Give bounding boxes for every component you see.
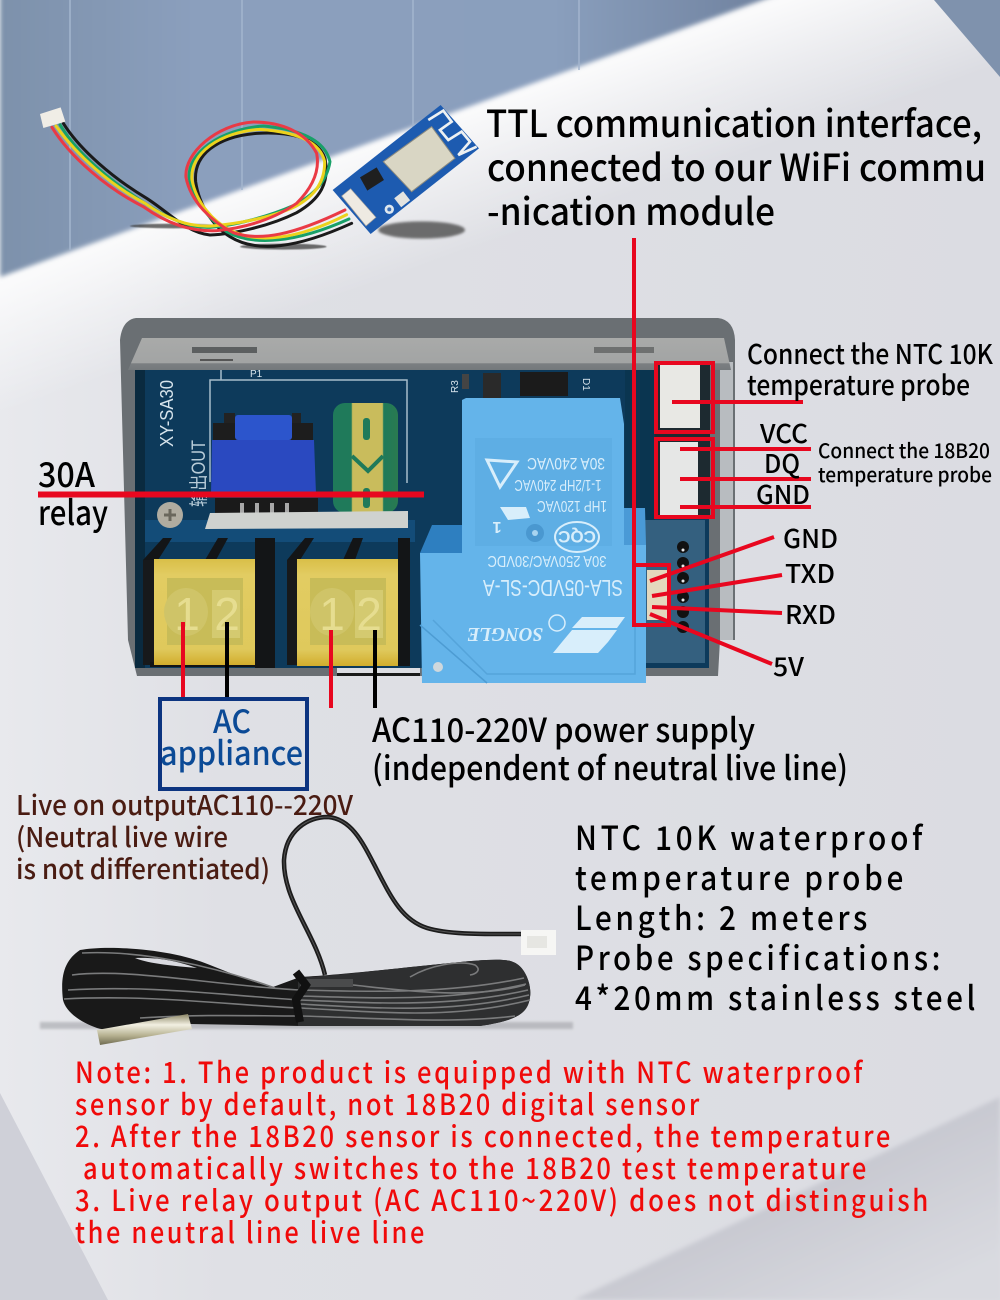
blue relay: SONGLE bbox=[467, 623, 543, 645]
silkscreen labels: R3 bbox=[450, 380, 461, 393]
labels: TTL pins: GND bbox=[783, 519, 838, 556]
red note bbox=[75, 1050, 931, 1252]
labels: TTL pins: 5V bbox=[773, 647, 805, 684]
title: TTL communication interface: connected to our WiFi commu bbox=[487, 138, 986, 192]
terminal block left: 2 bbox=[214, 588, 240, 640]
title: TTL communication interface: TTL communication interface, bbox=[486, 94, 982, 148]
label: live output: is not differentiated) bbox=[16, 848, 270, 887]
blue relay: 1HP 120VAC bbox=[537, 497, 607, 514]
blue relay: SLA-05VDC-SL-A bbox=[483, 575, 623, 601]
electrolytic capacitor bbox=[333, 403, 398, 513]
AC appliance box bbox=[160, 697, 307, 789]
AC appliance box: AC bbox=[213, 697, 251, 743]
labels: VCC DQ GND: DQ bbox=[764, 444, 800, 481]
module board bbox=[333, 105, 479, 234]
red note: Note: 1. The product is equipped with NTC waterproof bbox=[75, 1050, 865, 1092]
NTC probe specification: NTC 10K waterproof bbox=[575, 812, 926, 860]
terminal block right: 1 bbox=[319, 588, 345, 640]
blue relay: 30A 250VAC/30VDC bbox=[488, 552, 606, 569]
probe plug bbox=[521, 930, 556, 955]
blue relay: 1 bbox=[492, 518, 501, 535]
controller board photo bbox=[120, 318, 735, 683]
red note: 2. After the 18B20 sensor is connected, the temperature bbox=[75, 1114, 893, 1156]
blue relay: 30A 240VAC bbox=[527, 454, 605, 473]
white connectors bbox=[655, 362, 710, 517]
coil of cable bbox=[62, 948, 530, 1031]
blue relay bbox=[420, 398, 646, 683]
red leader lines and outlines bbox=[38, 238, 811, 708]
red note: automatically switches to the 18B20 test temperature bbox=[83, 1146, 869, 1188]
label: NTC 10K probe connector bbox=[747, 333, 993, 403]
silkscreen labels: D1 bbox=[580, 378, 591, 391]
label: 30A relay: 30A bbox=[38, 448, 96, 497]
terminal block left: 1 bbox=[174, 588, 200, 640]
terminal block right bbox=[287, 538, 410, 666]
label: live output: Live on outputAC110--220V bbox=[16, 784, 354, 823]
labels: TTL pins: TXD bbox=[785, 554, 835, 591]
screw bbox=[157, 502, 183, 528]
label: power supply bbox=[372, 704, 848, 790]
terminal block left bbox=[143, 538, 275, 668]
silkscreen labels: P1 bbox=[250, 369, 263, 380]
terminal block right: 2 bbox=[356, 588, 382, 640]
label: 18B20 probe connector bbox=[818, 435, 992, 488]
label: power supply: AC110-220V power supply bbox=[372, 704, 755, 752]
red note: sensor by default, not 18B20 digital sensor bbox=[75, 1082, 702, 1124]
small module bbox=[215, 498, 318, 514]
AC appliance box: appliance bbox=[160, 727, 303, 775]
silkscreen labels bbox=[157, 369, 671, 562]
stainless probe tip bbox=[97, 1014, 192, 1045]
blue relay: 1-1/2HP 240VAC bbox=[514, 476, 602, 493]
label: 18B20 probe connector: temperature probe bbox=[818, 459, 992, 488]
label: 30A relay: relay bbox=[38, 486, 108, 535]
labels: VCC DQ GND bbox=[756, 414, 810, 512]
labels: TTL pins bbox=[773, 519, 838, 684]
blue relay: CQC bbox=[558, 527, 596, 546]
label: live output: (Neutral live wire bbox=[16, 816, 228, 855]
labels: TTL pins: RXD bbox=[785, 595, 836, 632]
label: live output bbox=[16, 784, 354, 887]
right pcb strip bbox=[643, 520, 705, 663]
title: TTL communication interface: -nication module bbox=[487, 182, 775, 236]
label: NTC 10K probe connector: temperature probe bbox=[747, 364, 970, 403]
labels: VCC DQ GND: GND bbox=[756, 475, 810, 512]
smd parts bbox=[483, 373, 501, 398]
label: 18B20 probe connector: Connect the 18B20 bbox=[818, 435, 990, 464]
probe loop bbox=[284, 817, 521, 975]
wifi module and cable bbox=[40, 105, 479, 250]
black leader lines bbox=[227, 622, 375, 708]
cable plug bbox=[40, 107, 65, 128]
silkscreen labels: JP3 bbox=[651, 550, 671, 562]
NTC temperature probe cable photo bbox=[40, 817, 573, 1045]
label: 30A relay bbox=[38, 448, 108, 535]
NTC probe specification: Length: 2 meters bbox=[575, 892, 871, 940]
module connector bbox=[342, 189, 376, 226]
silkscreen labels: 输出OUT bbox=[188, 440, 210, 507]
cable bbox=[52, 122, 352, 246]
red note: the neutral line live line bbox=[75, 1210, 427, 1252]
title: TTL communication interface bbox=[486, 94, 986, 236]
label: power supply: (independent of neutral live line) bbox=[372, 742, 848, 790]
NTC probe specification: temperature probe bbox=[575, 852, 907, 900]
pcb bbox=[135, 370, 709, 668]
silkscreen labels: XY-SA30 bbox=[157, 380, 177, 447]
labels: VCC DQ GND: VCC bbox=[759, 414, 808, 451]
NTC probe specification bbox=[575, 812, 979, 1020]
transformer bbox=[211, 413, 316, 494]
NTC probe specification: Probe specifications: bbox=[575, 932, 944, 980]
